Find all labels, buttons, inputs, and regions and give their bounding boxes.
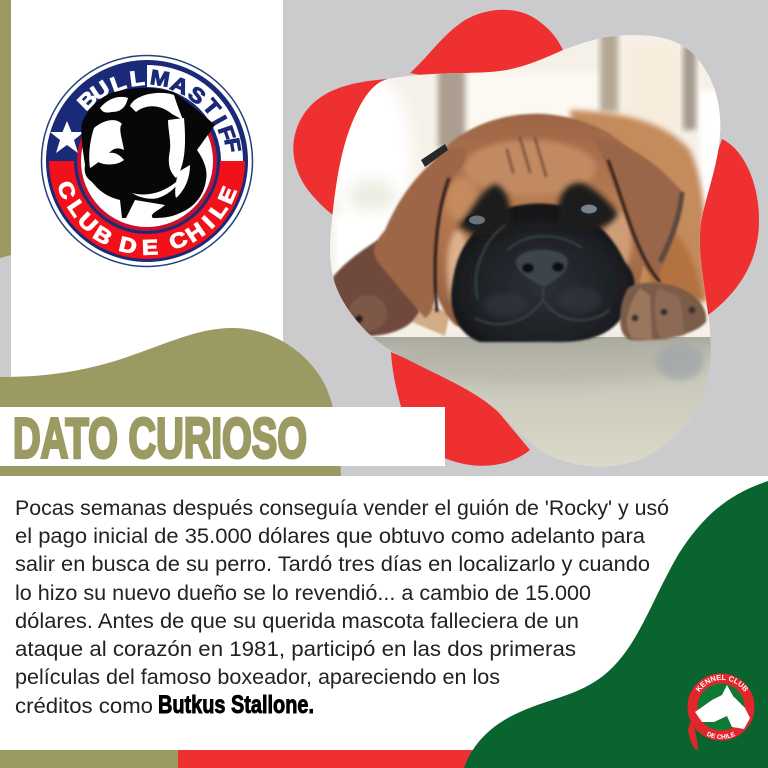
body text: salir en busca de su perro. Tardó tres días en localizarlo y cuando [15,553,650,576]
muzzle folds [475,225,610,324]
right ear [592,135,682,280]
logo: Kennel Club de Chile: KENNEL CLUB [696,674,748,692]
logo text: CLUB DE CHILE: H [182,218,209,247]
title: DATO CURIOSO [13,406,307,470]
olive wave shape [0,328,341,476]
logo star [50,121,84,153]
logo: Bullmastiff Club de Chile [42,56,252,266]
logo text: BULLMASTIFF: F [220,136,246,154]
kennel logo dog [695,685,750,729]
logo text: CLUB DE CHILE: E [214,183,241,207]
body text [15,497,669,719]
forehead wrinkles [507,138,546,176]
body text: el pago inicial de 35.000 dólares que obtuvo como adelanto para [15,525,645,548]
logo dog head [81,88,215,218]
logo text: BULLMASTIFF: I [208,112,232,129]
background: gray panel [0,0,768,476]
panel: title band [0,406,445,470]
muzzle highlights [484,289,600,316]
logo text: CLUB DE CHILE: L [205,197,232,223]
logo text: BULLMASTIFF: S [183,81,210,109]
black muzzle and mask [451,204,634,342]
logo text: BULLMASTIFF: L [107,70,129,97]
left leg and paw [333,240,450,336]
forehead highlights [446,140,632,306]
logo text: BULLMASTIFF: M [149,65,171,92]
logo text: BULLMASTIFF [73,65,246,154]
logo text: BULLMASTIFF: A [167,71,192,100]
bottom band red [178,750,478,768]
panel: white logo column [11,0,283,380]
bottom band olive [0,750,179,768]
logo text: CLUB DE CHILE: C [53,178,80,202]
dog body [570,110,708,320]
body text: dólares. Antes de que su querida mascota falleciera de un [15,610,579,633]
body text: ataque al corazón en 1981, participó en las dos primeras [15,638,576,661]
nose [516,250,568,287]
body text: películas del famoso boxeador, apareciendo en los [15,666,500,689]
logo text: CLUB DE CHILE: D [117,232,139,259]
olive left strip [0,0,11,258]
logo text: BULLMASTIFF: T [198,94,226,121]
body text: Pocas semanas después conseguía vender el guión de 'Rocky' y usó [15,497,669,520]
photo background [325,30,725,340]
red blob behind photo [293,10,759,466]
logo: Kennel Club de Chile: DE CHILE [706,732,736,740]
body text: lo hizo su nuevo dueño se lo revendió... a cambio de 15.000 [15,582,591,605]
logo text: BULLMASTIFF: B [73,86,102,115]
right paw [620,283,706,340]
logo text: CLUB DE CHILE: U [73,208,102,237]
body text: Butkus Stallone. [158,691,314,719]
blurred posts [438,32,696,148]
logo text: BULLMASTIFF: U [87,76,114,105]
eye patches [458,183,618,238]
logo text: CLUB DE CHILE: C [166,227,190,254]
floor [372,337,711,466]
body text: créditos como [15,695,153,718]
photo: bullmastiff puppy [325,30,725,477]
logo text: BULLMASTIFF: L [128,66,146,91]
eyes [465,204,597,224]
logo text: BULLMASTIFF: F [213,123,240,144]
logo text: CLUB DE CHILE: I [198,212,219,233]
head [424,114,647,338]
floor reflection [405,344,706,384]
logo text: CLUB DE CHILE: B [89,221,116,250]
background: white lower panel [0,476,768,768]
left ear [374,146,466,318]
logo text: CLUB DE CHILE: E [142,236,158,259]
logo text: CLUB DE CHILE [53,178,241,259]
logo text: CLUB DE CHILE: L [63,196,90,221]
kennel logo ribbon [688,722,698,750]
blurred window light [332,45,725,275]
logo: Kennel Club de Chile [688,674,754,750]
green wave corner [464,481,768,768]
